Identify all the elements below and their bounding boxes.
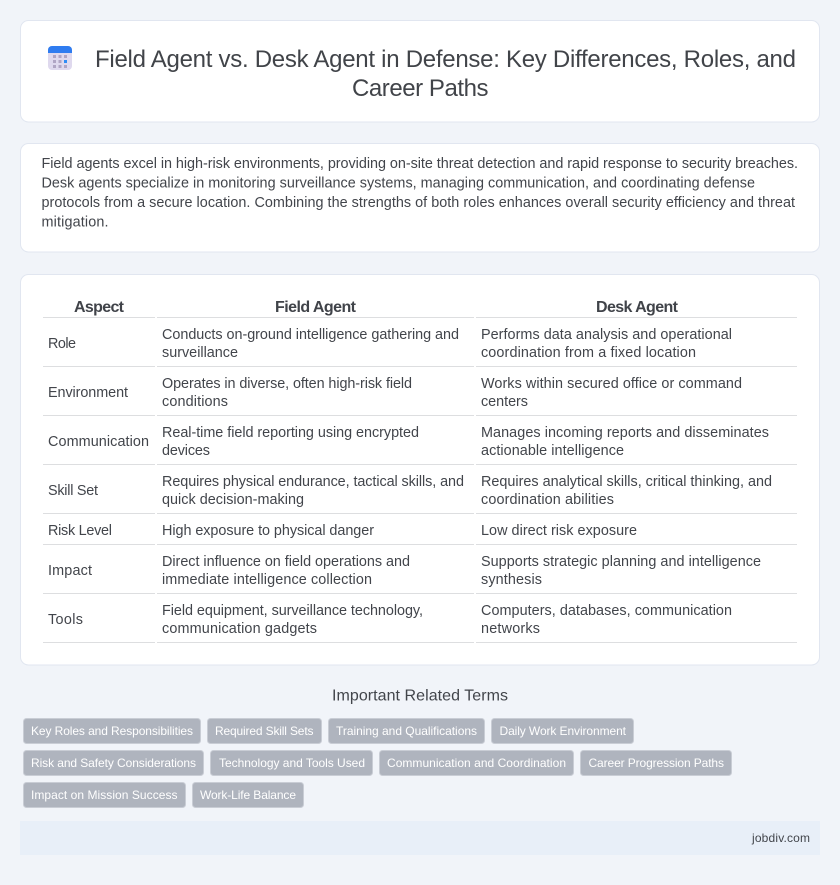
row: tools: Field equipment, surveillance technology,	[162, 603, 423, 619]
row: environment: centers	[481, 394, 528, 410]
tag	[328, 718, 484, 744]
row: impact: immediate intelligence collection	[162, 572, 372, 588]
row: skill set: Skill Set	[48, 483, 98, 499]
table header: Desk Agent	[596, 299, 679, 316]
tag	[24, 750, 204, 776]
row: skill set: Requires physical endurance, tactical skills, and	[162, 474, 464, 490]
row: tools: networks	[481, 621, 540, 637]
footer	[20, 821, 820, 855]
title: Field Agent vs. Desk Agent in Defense: Key Differences, Roles, and	[95, 46, 796, 73]
tags: related terms	[24, 718, 732, 808]
table header: Aspect	[74, 299, 125, 316]
row: skill set: Requires analytical skills, critical thinking, and	[481, 474, 772, 490]
tag	[24, 718, 200, 744]
row: communication: Communication	[48, 434, 149, 450]
row: role: surveillance	[162, 345, 238, 361]
tag	[580, 750, 732, 776]
row: role: Performs data analysis and operational	[481, 327, 732, 343]
row: tools: communication gadgets	[162, 621, 317, 637]
text block: introduction paragraph: protocols from a secure location. Combining the strengths of both roles enhances overall security efficiency and threat	[42, 195, 795, 211]
footer: jobdiv.com	[751, 831, 810, 845]
tag: Risk and Safety Considerations	[31, 756, 196, 770]
row: communication: actionable intelligence	[481, 443, 624, 459]
row: skill set: quick decision-making	[162, 492, 304, 508]
row: tools	[43, 603, 797, 642]
tag	[208, 718, 322, 744]
row: skill set: coordination abilities	[481, 492, 614, 508]
panel: title card	[20, 20, 820, 122]
panel: introduction	[20, 144, 820, 252]
row: impact	[43, 554, 797, 594]
row: skill set	[43, 474, 797, 514]
tag: Training and Qualifications	[336, 724, 477, 738]
row: environment: conditions	[162, 394, 228, 410]
tag	[380, 750, 574, 776]
row: risk level	[43, 523, 797, 544]
tag: Key Roles and Responsibilities	[31, 724, 193, 738]
text block: introduction paragraph: Desk agents specialize in monitoring surveillance systems, managing communication, and coordinating defense	[42, 176, 755, 192]
row: environment: Environment	[48, 385, 128, 401]
title: Career Paths	[352, 75, 488, 102]
row: communication	[43, 425, 797, 464]
row: role	[43, 327, 797, 366]
row: tools: Tools	[48, 612, 83, 628]
row: role: Role	[48, 336, 76, 352]
text block: introduction paragraph: mitigation.	[42, 214, 108, 230]
icon: calendar	[48, 46, 72, 70]
tag: Communication and Coordination	[387, 756, 566, 770]
tag	[24, 782, 186, 808]
tag: Required Skill Sets	[215, 724, 314, 738]
row: impact: Direct influence on field operations and	[162, 554, 410, 570]
row: environment	[43, 376, 797, 416]
row: communication: Manages incoming reports and disseminates	[481, 425, 769, 441]
row: impact: Supports strategic planning and intelligence	[481, 554, 761, 570]
row: communication: Real-time field reporting using encrypted	[162, 425, 419, 441]
row: tools: Computers, databases, communication	[481, 603, 732, 619]
row: impact: Impact	[48, 563, 92, 579]
row: environment: Works within secured office or command	[481, 376, 742, 392]
tag: Impact on Mission Success	[31, 788, 178, 802]
tag: Technology and Tools Used	[219, 756, 365, 770]
row: role: Conducts on-ground intelligence gathering and	[162, 327, 459, 343]
tag: Daily Work Environment	[500, 724, 627, 738]
text block: introduction paragraph	[42, 156, 798, 230]
title	[95, 46, 796, 102]
text block: introduction paragraph: Field agents excel in high-risk environments, providing on-site threat detection and rapid response to security breaches.	[42, 156, 798, 172]
row: risk level: Risk Level	[48, 523, 112, 539]
panel: comparison table	[20, 274, 820, 665]
row: communication: devices	[162, 443, 210, 459]
table header: Field Agent	[275, 299, 357, 316]
row: risk level: High exposure to physical danger	[162, 523, 374, 539]
tag: Career Progression Paths	[588, 756, 724, 770]
tag	[492, 718, 634, 744]
row: impact: synthesis	[481, 572, 542, 588]
row: role: coordination from a fixed location	[481, 345, 696, 361]
heading: important related terms: Important Related Terms	[332, 688, 508, 704]
row: environment: Operates in diverse, often high-risk field	[162, 376, 412, 392]
table header	[43, 299, 797, 318]
tag	[210, 750, 372, 776]
row: risk level: Low direct risk exposure	[481, 523, 637, 539]
tag: Work-Life Balance	[200, 788, 296, 802]
tag	[192, 782, 304, 808]
